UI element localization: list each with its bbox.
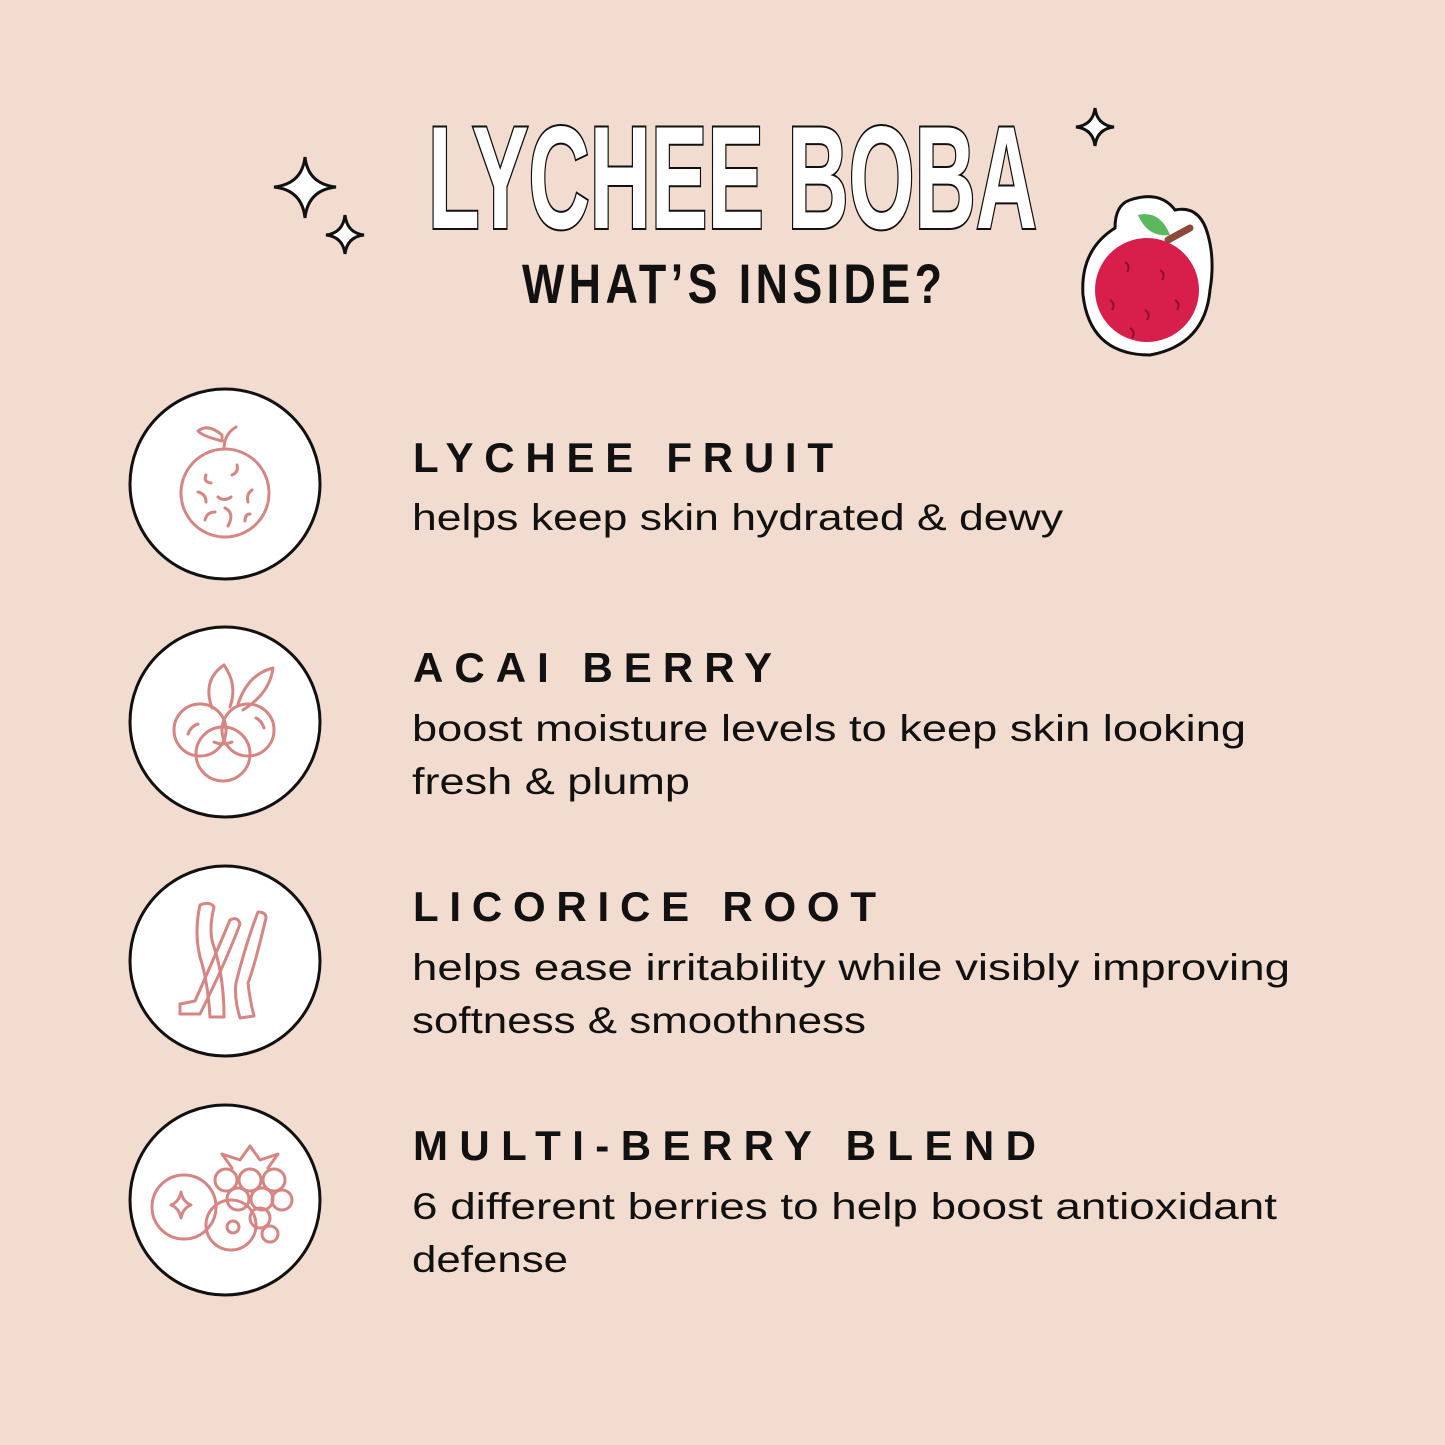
icon: berries circle [130, 1105, 320, 1295]
panel: lychee fruit [130, 389, 1064, 579]
text block: defense [412, 1239, 568, 1280]
heading: LICORICE ROOT [413, 883, 876, 930]
heading: LYCHEE FRUIT [413, 434, 833, 481]
text block: 6 different berries to help boost antioxidant [412, 1186, 1278, 1227]
text block: helps ease irritability while visibly improving [412, 947, 1290, 988]
panel: multi-berry blend [130, 1105, 1278, 1295]
text block [412, 708, 1246, 802]
subtitle: WHAT’S INSIDE? [522, 252, 942, 315]
text block [412, 947, 1290, 1041]
heading: ACAI BERRY [413, 644, 772, 691]
panel: licorice root [130, 866, 1290, 1056]
text block: softness & smoothness [412, 1000, 866, 1041]
text block: boost moisture levels to keep skin looking [412, 708, 1246, 749]
panel: acai berry [130, 627, 1246, 817]
icon: acai circle [130, 627, 320, 817]
text block: fresh & plump [412, 761, 690, 802]
icon: lychee sticker [1083, 197, 1212, 355]
icon: licorice circle [130, 866, 320, 1056]
icon: lychee circle [130, 389, 320, 579]
text block: helps keep skin hydrated & dewy [412, 497, 1064, 538]
heading: MULTI-BERRY BLEND [413, 1122, 1036, 1169]
text block [412, 1186, 1278, 1280]
icon: sparkle right [1076, 108, 1114, 146]
icon: sparkles left [274, 157, 364, 254]
